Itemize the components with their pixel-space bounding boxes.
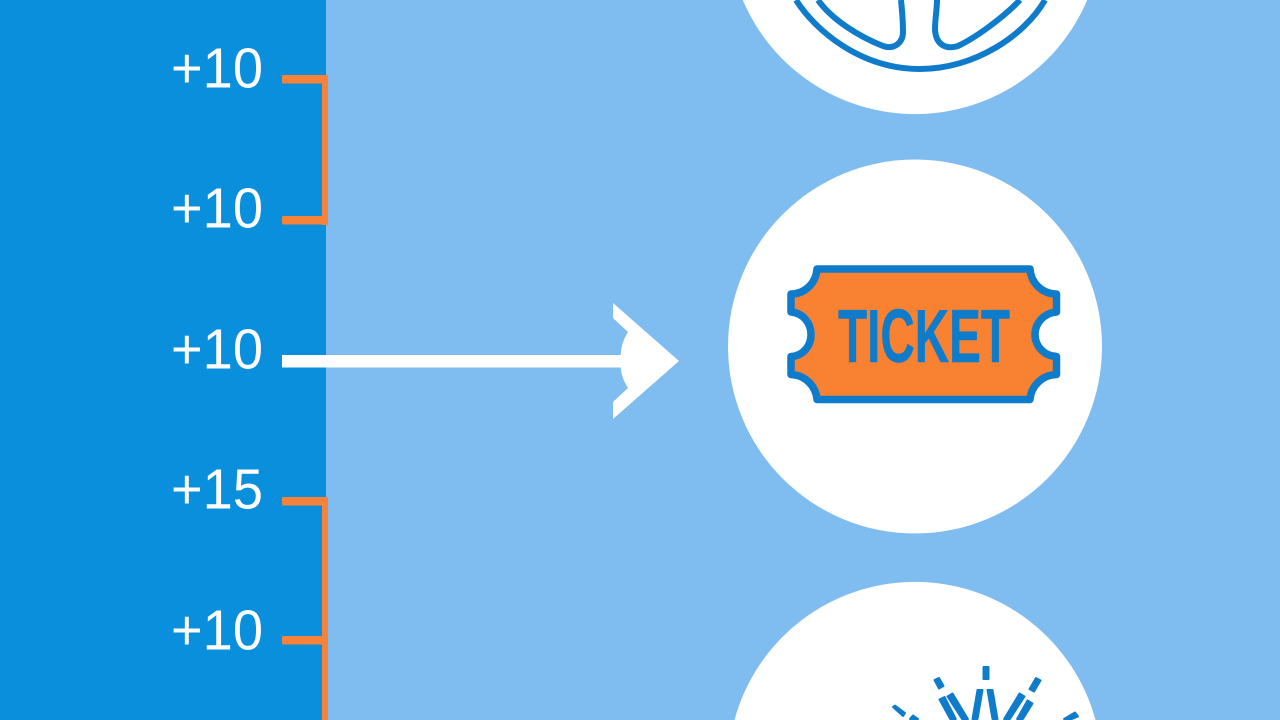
- icon: firework burst: [893, 667, 1078, 719]
- arrow: score to ticket: [282, 303, 679, 419]
- icon: rounded outline shape: [796, 0, 1045, 69]
- icon: ticket stub: [791, 269, 1056, 400]
- orange bracket: lower group: [282, 497, 328, 720]
- score: +10 first: +10: [171, 36, 263, 100]
- score labels: [171, 36, 263, 662]
- score: +15: +15: [171, 458, 263, 522]
- icon circle: ticket: [728, 160, 1102, 534]
- icon circle: top with outline icon: [743, 0, 1087, 114]
- score: +10 fifth: +10: [171, 598, 263, 662]
- icon text: TICKET: TICKET: [838, 294, 1010, 378]
- score: +10 third: +10: [171, 318, 263, 382]
- orange bracket: top pair: [282, 75, 328, 225]
- panel: dark blue score column: [0, 0, 326, 720]
- icon circle: bottom with burst icon: [734, 582, 1096, 720]
- score: +10 second: +10: [171, 176, 263, 240]
